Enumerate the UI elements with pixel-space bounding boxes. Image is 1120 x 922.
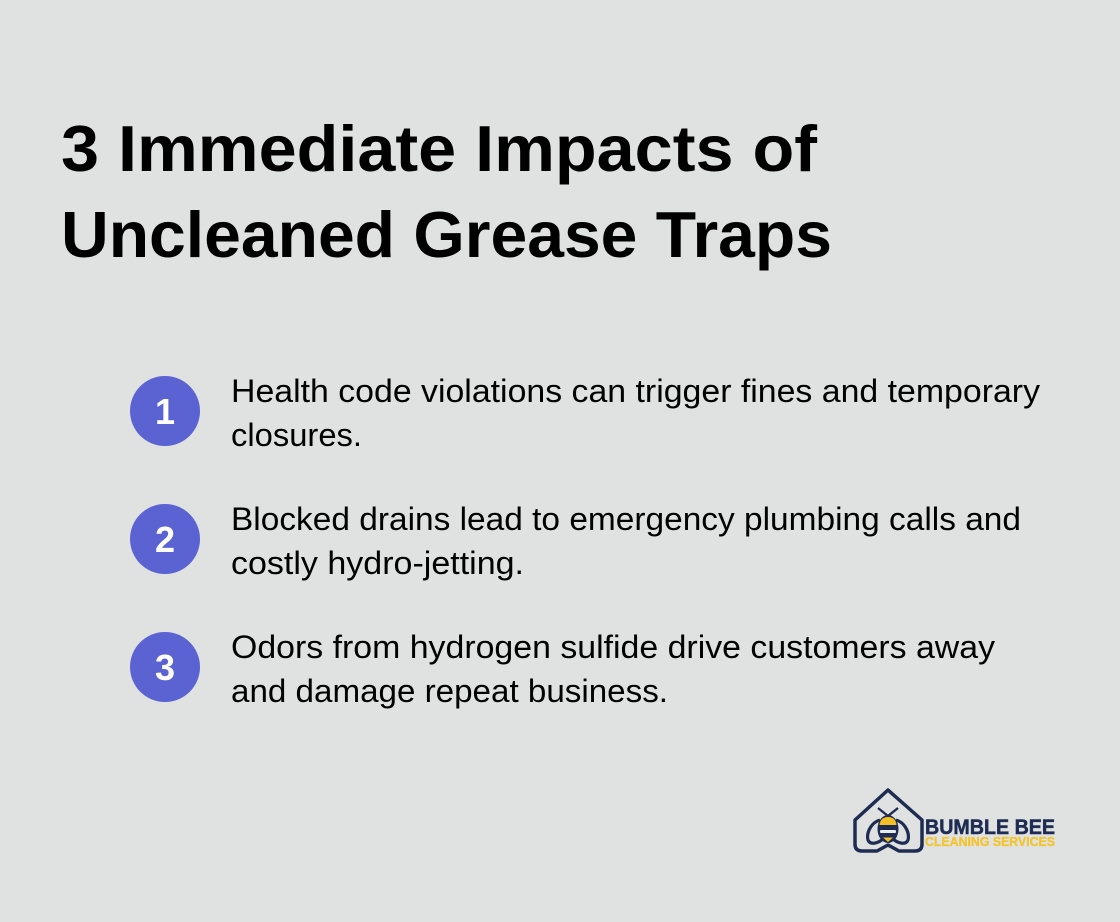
item 2 text: costly hydro-jetting. [231,545,524,581]
logo tagline: CLEANING SERVICES [925,835,1055,849]
number badge 1: 1 [155,391,175,432]
list item 2 [130,501,1021,581]
list item 1 [130,373,1040,453]
number badge 3: 3 [155,647,175,688]
item 2 text [231,501,1021,581]
item 3 text [231,629,995,709]
title [61,112,832,271]
logo: Bumble Bee Cleaning Services [855,790,1055,851]
item 3 text: and damage repeat business. [231,673,668,709]
number badge 2 [130,504,200,574]
item 3 text: Odors from hydrogen sulfide drive customers away [231,629,995,665]
item 1 text [231,373,1040,453]
number badge 1 [130,376,200,446]
icon: house with bee [855,790,922,851]
item 2 text: Blocked drains lead to emergency plumbing calls and [231,501,1021,537]
item 1 text: Health code violations can trigger fines and temporary [231,373,1040,409]
number badge 3 [130,632,200,702]
number badge 2: 2 [155,519,175,560]
title: Uncleaned Grease Traps [61,198,832,271]
title: 3 Immediate Impacts of [61,112,817,185]
list item 3 [130,629,995,709]
logo wordmark: BUMBLE BEE [925,816,1055,839]
item 1 text: closures. [231,417,362,453]
